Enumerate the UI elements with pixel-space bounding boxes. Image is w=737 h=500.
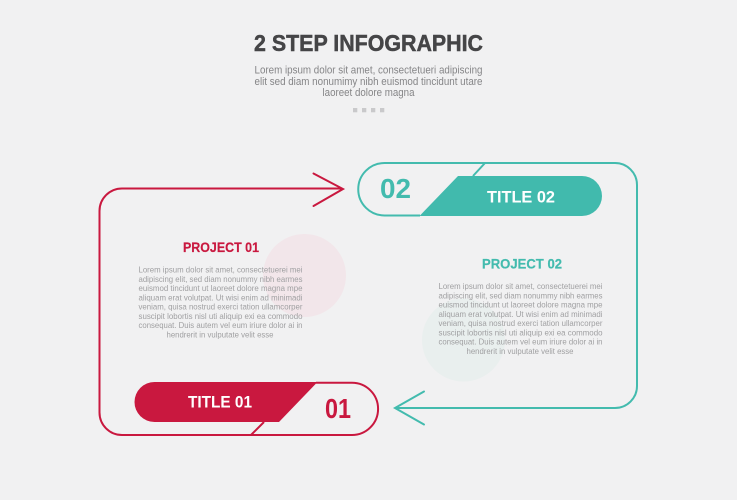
heading: project 02: PROJECT 02 [482,256,562,272]
teal outline frame [358,163,637,408]
text block: project 01: hendrerit in vulputate velit esse [166,330,274,340]
text block: project 01: veniam, quisa nostrud exerci tation ullamcorper [138,302,303,312]
step number 02: 02 [380,173,411,204]
header [254,30,483,112]
pagination dots [353,108,384,112]
text block: project 01 [138,264,303,340]
text block: project 02: euismod tincidunt ut laoreet dolore magna mpe [438,300,603,310]
panel: step 02 [358,163,637,424]
text block: project 01: consequat. Duis autem vel eum iriure dolor ai in [138,320,303,330]
badge label: TITLE 02 [487,188,555,206]
notch stroke [473,163,485,176]
decorative circle: project 01 [263,234,346,317]
subtitle: elit sed diam nonumimy nibh euismod tincidunt utare [254,76,482,88]
arrow: red right [314,174,343,206]
text block: project 01: Lorem ipsum dolor sit amet, consectetuerei mei [138,264,303,274]
text block: project 01: adipiscing elit, sed diam nonummy nibh earmes [138,274,302,284]
badge: title 01 [134,382,318,422]
notch stroke [251,422,264,435]
subtitle [254,65,482,99]
panel: step 01 [100,174,378,435]
text block: project 02: aliquam erat volutpat. Ut wisi enim ad minimadi [438,309,603,319]
arrow: teal left [395,392,424,424]
text block: project 01: aliquam erat volutpat. Ut wisi enim ad minimadi [138,292,303,302]
text block: project 02: suscipit lobortis nisl uti aliquip exi ea commodo [438,328,603,338]
heading: project 01: PROJECT 01 [183,239,259,255]
subtitle: laoreet dolore magna [322,87,414,99]
subtitle: Lorem ipsum dolor sit amet, consectetueri adipiscing [254,65,482,77]
step number 01: 01 [325,393,351,424]
text block: project 02: hendrerit in vulputate velit esse [466,346,574,356]
decorative circle: project 02 [422,298,505,382]
text block: project 01: suscipit lobortis nisl uti aliquip exi ea commodo [138,311,303,321]
text block: project 02: consequat. Duis autem vel eum iriure dolor ai in [438,336,603,346]
badge label: TITLE 01 [188,392,252,412]
text block: project 02 [438,281,603,356]
text block: project 01: euismod tincidunt ut laoreet dolore magna mpe [138,283,303,293]
text block: project 02: adipiscing elit, sed diam nonummy nibh earmes [438,290,602,300]
red outline frame [100,188,378,435]
title: 2 STEP INFOGRAPHIC [254,30,483,56]
text block: project 02: Lorem ipsum dolor sit amet, consectetuerei mei [438,281,603,291]
text block: project 02: veniam, quisa nostrud exerci tation ullamcorper [438,318,603,328]
badge: title 02 [420,176,602,216]
